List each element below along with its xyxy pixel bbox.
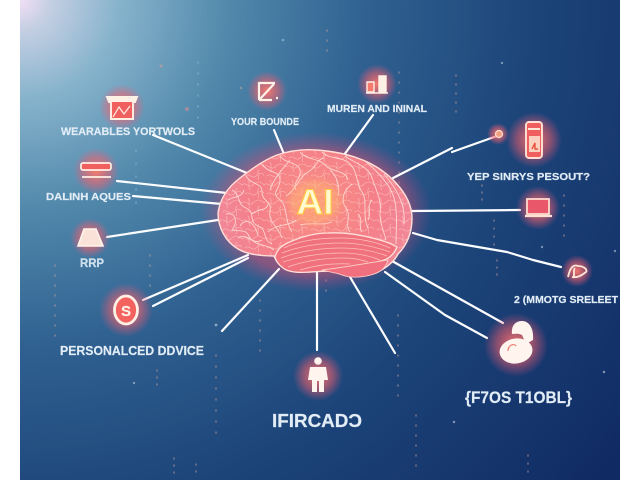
icon: chart note: [247, 71, 287, 111]
label: yep sinrys pesout: YEP SINRYS PESOUT?: [467, 171, 590, 183]
AI label: AI: [296, 183, 334, 222]
AI glow: [289, 180, 341, 224]
label: muren and ininal: MUREN AND ININAL: [327, 104, 427, 115]
label: rrp: RRP: [80, 258, 104, 270]
central brain: [218, 150, 412, 277]
connector lines: [107, 115, 561, 353]
icon: skull and egg: [484, 313, 548, 377]
icon: trapezoid: [70, 218, 110, 258]
label: dalinh aques: DALINH AQUES: [46, 191, 131, 203]
label: wearables: WEARABLES YORTWOLS: [61, 126, 195, 138]
brain: cerebrum: [218, 150, 412, 277]
icon: smartphone: [506, 112, 562, 168]
icon: buildings: [357, 64, 397, 104]
icon: person: [293, 351, 343, 401]
brain: gyri lines: [226, 152, 404, 250]
label: your bounde: YOUR BOUNDE: [231, 116, 299, 128]
icon: squiggle: [561, 255, 593, 287]
label: ifircadj: IFIRCADƆ: [272, 411, 362, 431]
label: mmotg sreleet: 2 (MMOTG SRELEET: [514, 294, 619, 306]
icon: wearables box: [99, 84, 145, 130]
brain: temporal lobe: [275, 233, 397, 272]
icon: small node: [487, 123, 509, 145]
icon: bars: [73, 148, 119, 194]
label: personalced ddvice: PERSONALCED DDVICE: [60, 343, 204, 358]
icon: dollar coin: [99, 283, 153, 337]
icon: laptop: [516, 186, 560, 230]
label: fros tiobl: {F7OS T1OBL}: [465, 388, 572, 407]
brain halo: [200, 132, 432, 292]
brain: temporal striations: [281, 238, 390, 270]
brain: fine wrinkles: [218, 150, 412, 256]
brain: cerebellum: [322, 260, 388, 277]
icon: dollar coin: S: [121, 303, 131, 320]
